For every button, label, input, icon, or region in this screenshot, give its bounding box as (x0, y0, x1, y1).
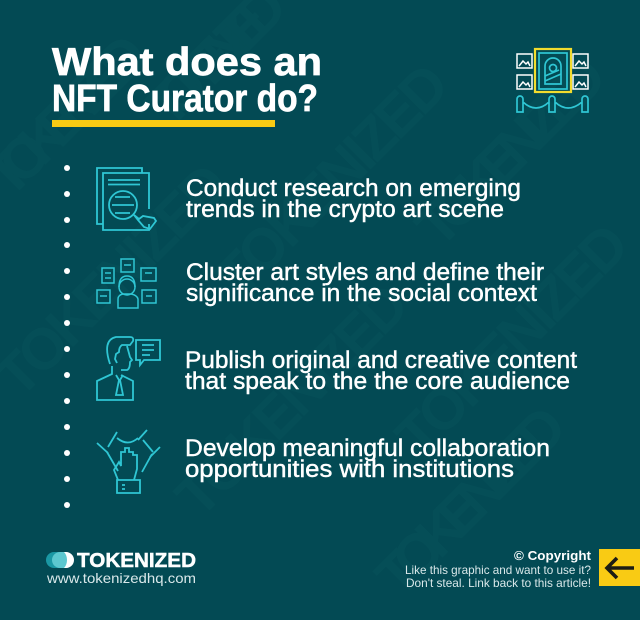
item text 2: Cluster art styles and define their (186, 259, 544, 286)
copyright note: Don't steal. Link back to this article! (406, 576, 591, 590)
title underline (52, 120, 275, 127)
icon: cluster of art styles (97, 259, 156, 308)
website url: www.tokenizedhq.com (46, 570, 196, 586)
title: NFT Curator do? (52, 78, 318, 120)
item text 3: that speak to the the core audience (185, 368, 570, 395)
item text 2 (186, 259, 544, 307)
item text 2: significance in the social context (186, 280, 537, 307)
item text 1: Conduct research on emerging (186, 175, 521, 202)
title (52, 41, 322, 120)
copyright note: Like this graphic and want to use it? (405, 563, 591, 577)
item text 4 (185, 435, 550, 483)
logo: TOKENIZED (77, 550, 196, 572)
icon: gallery (517, 49, 588, 112)
text: TOKENIZED (363, 394, 579, 609)
arrow button (599, 549, 640, 586)
text: TOKENIZED (383, 211, 640, 469)
copyright note (405, 548, 592, 590)
item text 1: trends in the crypto art scene (186, 196, 504, 223)
item text 1 (186, 175, 521, 223)
icon: research documents (97, 168, 156, 230)
text: TOKENIZED (203, 51, 461, 309)
copyright note: © Copyright (514, 548, 592, 563)
text: TOKENIZED (403, 44, 619, 259)
item text 3: Publish original and creative content (185, 347, 577, 374)
icon: person speaking (97, 337, 160, 400)
item text 4: Develop meaningful collaboration (185, 435, 550, 462)
text: TOKENIZED (163, 271, 421, 529)
item text 4: opportunities with institutions (185, 456, 514, 483)
item text 3 (185, 347, 577, 395)
dotted line (64, 165, 70, 508)
title: What does an (52, 41, 322, 84)
icon: collaboration hands (97, 430, 160, 493)
